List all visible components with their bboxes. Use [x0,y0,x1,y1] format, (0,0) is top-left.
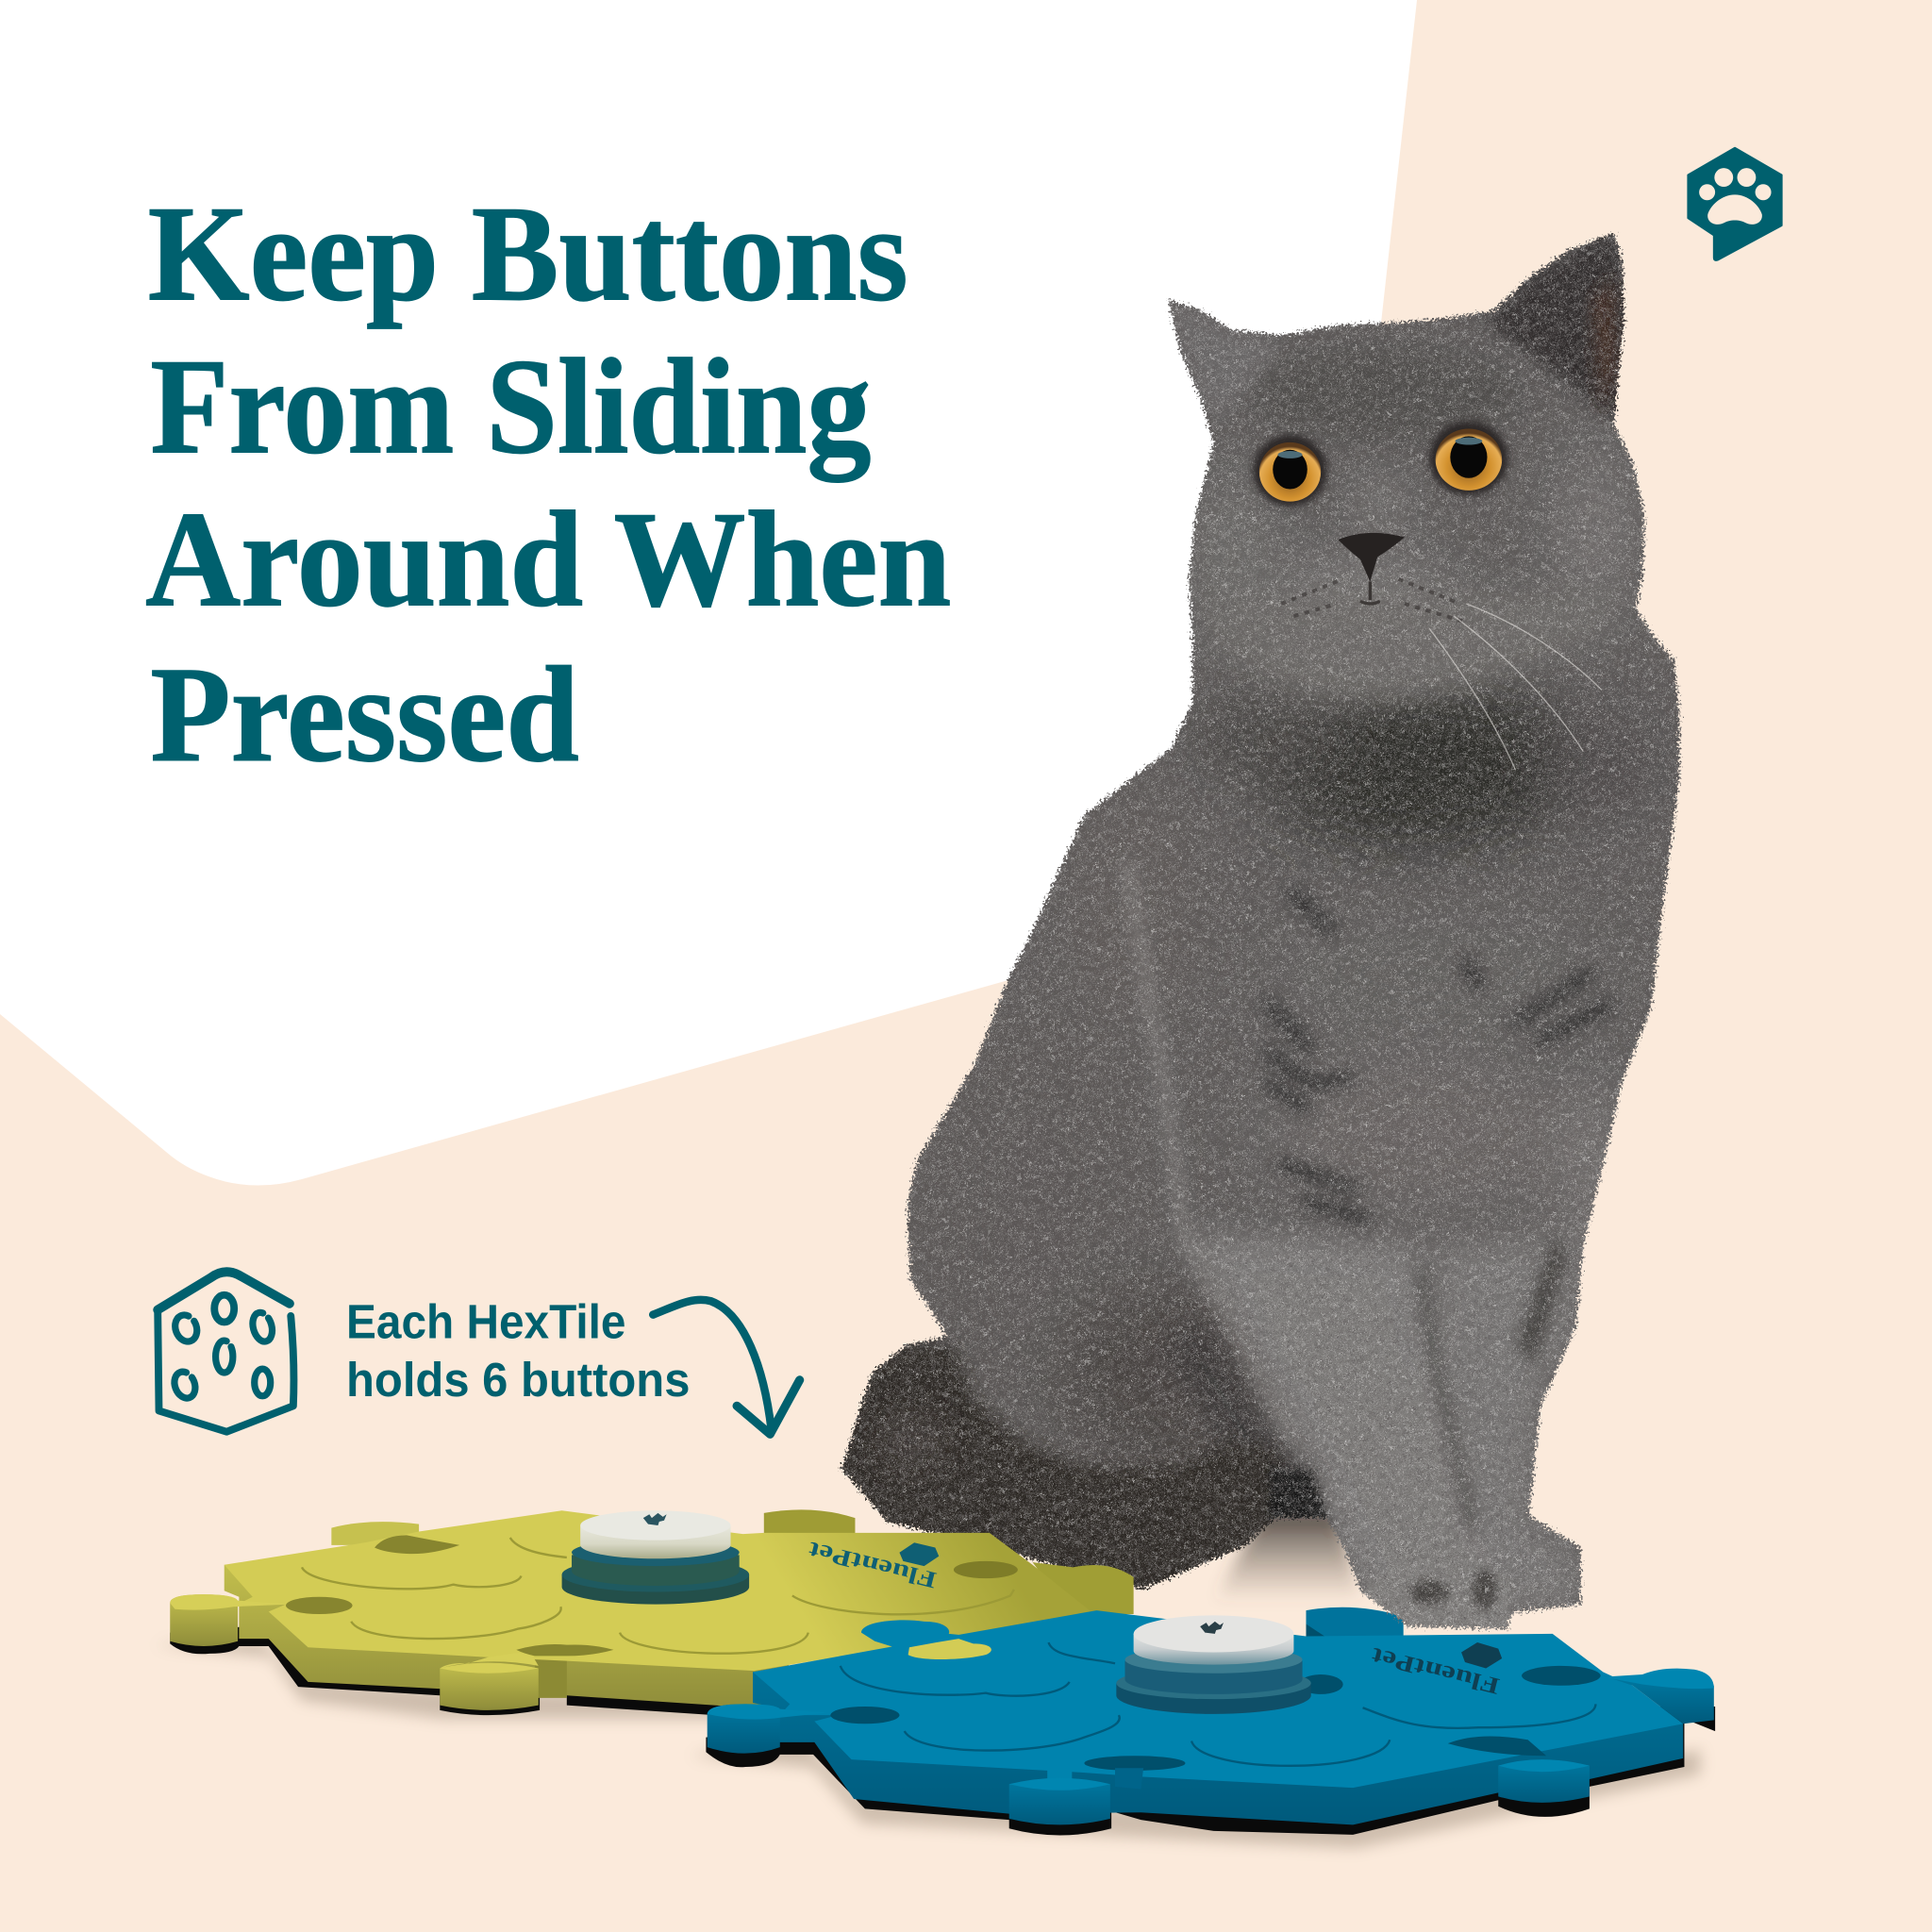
whiskers [1429,604,1602,770]
blue hextile [690,1607,1715,1848]
cat shadow on floor [1214,1509,1361,1602]
cat [813,209,1700,1651]
dark markings on right leg [1518,1232,1567,1368]
front left leg [1183,1232,1516,1633]
front right leg [1436,1232,1583,1614]
blue tile recessed button outlines [841,1642,1595,1766]
haunch dark seam [1183,1331,1306,1491]
cat paw resting on blue tile [1343,1541,1528,1645]
icon: FluentPet hexagon paw logo [1688,148,1782,260]
yellow tab interlocking into blue [908,1639,991,1659]
blue tile holes [830,1666,1601,1789]
yellow hextile [154,1509,1134,1720]
blue tile lower right tab [1498,1760,1590,1803]
blue tile logo [1368,1642,1502,1699]
title: From Sliding [150,331,871,482]
icon: hextile with six button holes [158,1272,293,1432]
blue tile right tab [1603,1675,1714,1724]
fur texture [813,209,1700,1651]
caption: each hextile holds 6 buttons: holds 6 buttons [346,1353,690,1407]
arrow: pointing to tiles [653,1300,800,1434]
blue tile black base [706,1700,1715,1835]
head underside ruff [1214,591,1614,703]
title: Around When [145,484,951,635]
yellow tile shadow [154,1639,789,1719]
right ear [1485,228,1633,425]
yellow tile back tabs [331,1522,419,1545]
title: Keep Buttons [148,178,908,329]
right eye [1429,422,1508,495]
caption: each hextile holds 6 buttons: Each HexTile [346,1294,626,1348]
yellow tile button [562,1510,749,1605]
blue tile left tab [708,1704,780,1754]
title: Pressed [150,640,579,791]
yellow tile left tab [170,1594,238,1646]
light edge between shoulder and haunch [1127,862,1327,1516]
tail [820,1341,1304,1602]
yellow tile black base [170,1626,789,1720]
yellow tile holes [286,1535,1018,1656]
background: white angular panel [0,0,1417,1186]
paw mark [643,1513,667,1525]
yellow tile top face [225,1510,1094,1671]
left ear [1164,295,1281,425]
cat body and head [813,209,1700,1651]
gap behind legs [1269,1466,1331,1528]
title [145,178,951,791]
paw mark [1200,1622,1224,1634]
dark seam between legs [1421,1269,1473,1528]
yellow tile recessed button outlines [302,1538,1014,1654]
caption: each hextile holds 6 buttons [346,1294,690,1407]
forehead [1251,350,1522,439]
blue tile shadow [690,1738,1700,1848]
blue tile back tab [1306,1607,1404,1637]
blue tab interlocking into yellow [861,1620,974,1647]
left eye [1253,435,1327,507]
broad shading [924,443,1657,1478]
yellow tile side faces [225,1565,789,1710]
yellow tile logo: FluentPet [806,1536,939,1592]
yellow tile bottom tab [440,1663,539,1710]
yellow tile right tab [1033,1562,1134,1614]
blue tile button [1116,1615,1311,1714]
blue tile logo: FluentPet [1368,1642,1502,1699]
blue tile top face [753,1610,1683,1788]
blue tile bottom tab [1009,1779,1110,1824]
nose and mouth [1281,533,1466,623]
tabby stripes [1269,893,1607,1220]
blue tile side faces [753,1614,1683,1824]
yellow tile logo [806,1536,939,1592]
